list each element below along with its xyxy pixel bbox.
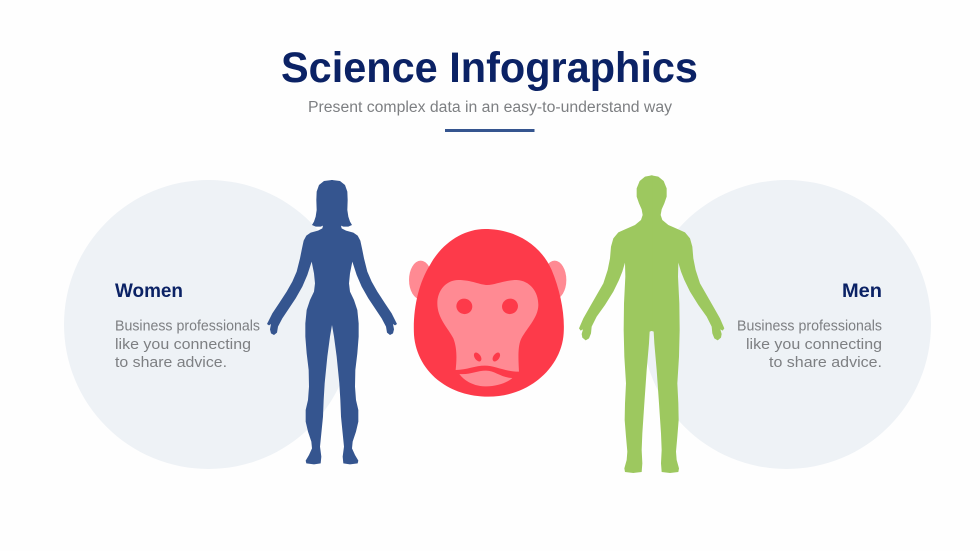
description: women: Business professionals — [115, 318, 260, 334]
description: men: Business professionals — [737, 318, 882, 334]
monkey ears — [409, 261, 566, 299]
panel: men circle — [642, 180, 931, 469]
panel: women circle — [64, 180, 353, 469]
description: men — [737, 318, 882, 371]
description: women: to share advice. — [115, 354, 227, 371]
monkey lower lip — [459, 371, 512, 386]
title: Science Infographics — [281, 44, 698, 92]
icon: monkey face — [409, 229, 566, 397]
monkey head — [414, 229, 564, 397]
description: men: to share advice. — [769, 354, 882, 371]
title underline — [445, 129, 534, 132]
heading: women: Women — [115, 281, 183, 302]
monkey muzzle — [437, 280, 538, 372]
icon: man silhouette — [579, 175, 724, 473]
monkey eyes and nostrils — [454, 296, 520, 363]
text block: men — [737, 281, 882, 371]
text block: women — [115, 281, 260, 371]
description: women — [115, 318, 260, 371]
subtitle: Present complex data in an easy-to-understand way — [308, 99, 672, 116]
icon: woman silhouette — [267, 180, 397, 464]
heading: men: Men — [842, 281, 882, 302]
description: men: like you connecting — [746, 336, 882, 353]
description: women: like you connecting — [115, 336, 251, 353]
